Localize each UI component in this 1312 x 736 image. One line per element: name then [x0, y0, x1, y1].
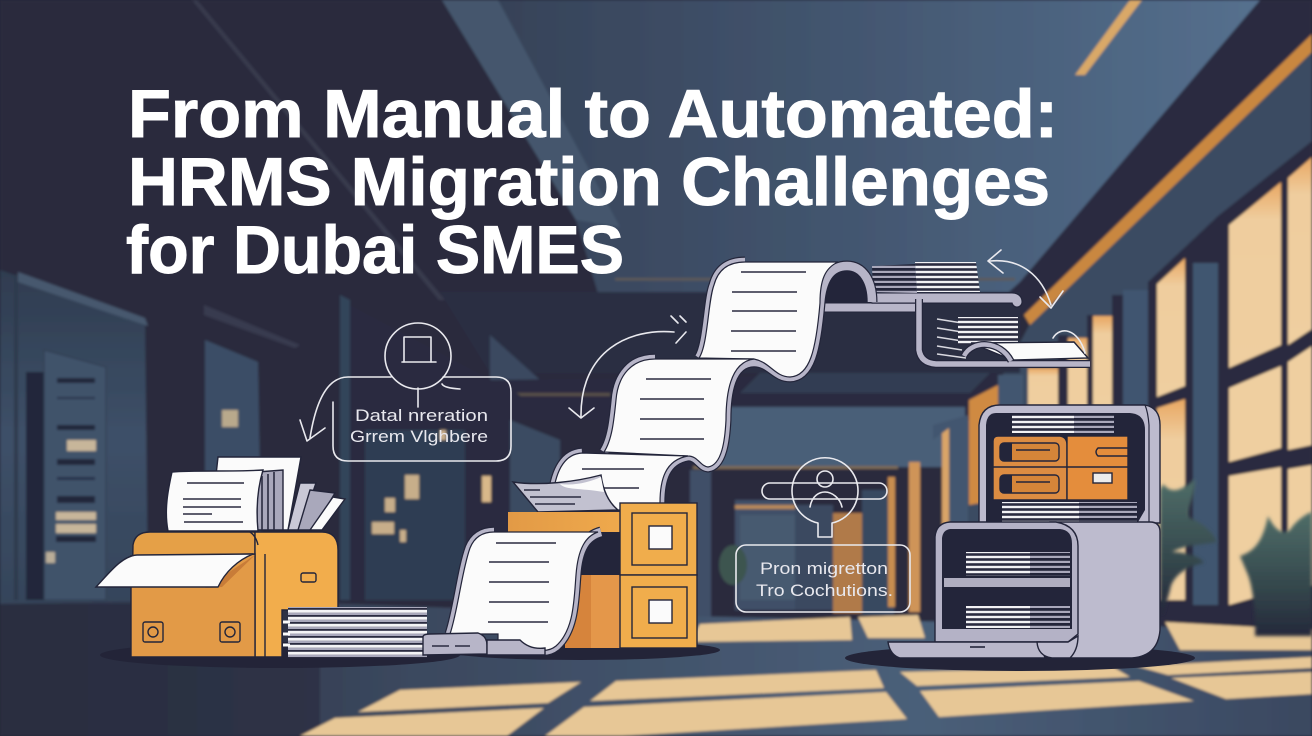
- top paper stack: [1012, 415, 1114, 433]
- paper stack middle: [937, 317, 1018, 358]
- sunlight on floor: [300, 615, 1312, 736]
- illustration: back device with drawers: [979, 405, 1160, 523]
- title: [126, 76, 1058, 288]
- scroll bottom section: [450, 532, 601, 650]
- device frame: [979, 405, 1160, 523]
- left callout: data migration: Grrem Vlghbere: [350, 427, 488, 446]
- screen: [942, 529, 1072, 629]
- arrow: small arc: [1053, 331, 1085, 353]
- orange drawers: [993, 436, 1128, 500]
- box latch right: [220, 622, 240, 642]
- fanned sheets: [288, 483, 345, 530]
- drawer handle bottom: [1000, 475, 1059, 493]
- box latch left: [143, 622, 163, 642]
- cabinet lower left: [565, 575, 591, 648]
- arrow: left loop: [569, 316, 686, 418]
- floor: [0, 600, 1312, 736]
- screen stack lower: [966, 606, 1070, 628]
- laptop base: [888, 642, 1045, 658]
- small grey sheet: [513, 475, 618, 512]
- person icon: [762, 458, 887, 537]
- corridor side windows: [888, 477, 895, 607]
- callout box and text: Pron migretton: [760, 559, 888, 578]
- illustration: scroll stage behind cabinet: [513, 262, 1090, 512]
- paper stack beside the box: [283, 607, 545, 658]
- folded strip: [423, 633, 545, 655]
- scroll lower section: [553, 453, 688, 510]
- drawer handle top: [1000, 443, 1059, 461]
- title: HRMS Migration Challenges: [128, 144, 1050, 220]
- scroll top section: [699, 262, 838, 377]
- plants in the background: [1160, 479, 1312, 636]
- scroll middle section: [604, 359, 754, 467]
- dark ceiling beam: [1000, 0, 1312, 316]
- back sheet: [210, 457, 301, 530]
- device screen: [986, 413, 1145, 522]
- shelf and dark arch: [820, 266, 872, 303]
- callout box and text: Tro Cochutions.: [756, 581, 893, 600]
- top shelf band: [873, 298, 1017, 302]
- right wall: [960, 48, 1312, 640]
- device body: [1050, 522, 1160, 658]
- callout frame and arrow: [300, 323, 511, 461]
- lower paper stack: [1002, 502, 1137, 523]
- screen shelf: [944, 578, 1070, 587]
- cabinet back top: [508, 512, 620, 532]
- box handle: [301, 573, 316, 582]
- corridor end: [690, 470, 711, 640]
- central beams: [440, 292, 1020, 373]
- scroll continuous right edge: [660, 266, 872, 503]
- callout text: Datal nreration: [355, 406, 488, 425]
- illustration: orange cabinet: [508, 503, 697, 648]
- illustration: front laptop device: [888, 522, 1160, 658]
- right callout: person icon and text: [736, 458, 910, 612]
- upper drawer: [620, 503, 697, 575]
- front sheet: [166, 470, 263, 531]
- file tabs: [257, 470, 283, 530]
- ceiling: [442, 0, 1262, 300]
- screen stack upper: [966, 552, 1070, 576]
- open page on shelf: [964, 342, 1088, 361]
- title: for Dubai SMES: [126, 212, 624, 288]
- arrow: top right loop: [988, 250, 1063, 308]
- left doors: [0, 270, 148, 604]
- arrows around the scroll: [569, 250, 1085, 418]
- callout box and text: [736, 545, 910, 612]
- far window column: [1028, 368, 1058, 408]
- laptop screen frame: [935, 522, 1078, 642]
- title: From Manual to Automated:: [128, 76, 1058, 152]
- box flap: [96, 554, 255, 588]
- illustration: left orange box with papers: [96, 457, 345, 657]
- lower drawer: [620, 575, 697, 648]
- floor shadows: [100, 640, 1195, 671]
- left callout: data migration: [300, 323, 511, 461]
- near windows frame: [1148, 141, 1312, 640]
- curved foot: [1037, 636, 1078, 658]
- box back and panels: [131, 532, 255, 657]
- paper stack top: [872, 262, 980, 293]
- orange wall strip: [1024, 34, 1312, 325]
